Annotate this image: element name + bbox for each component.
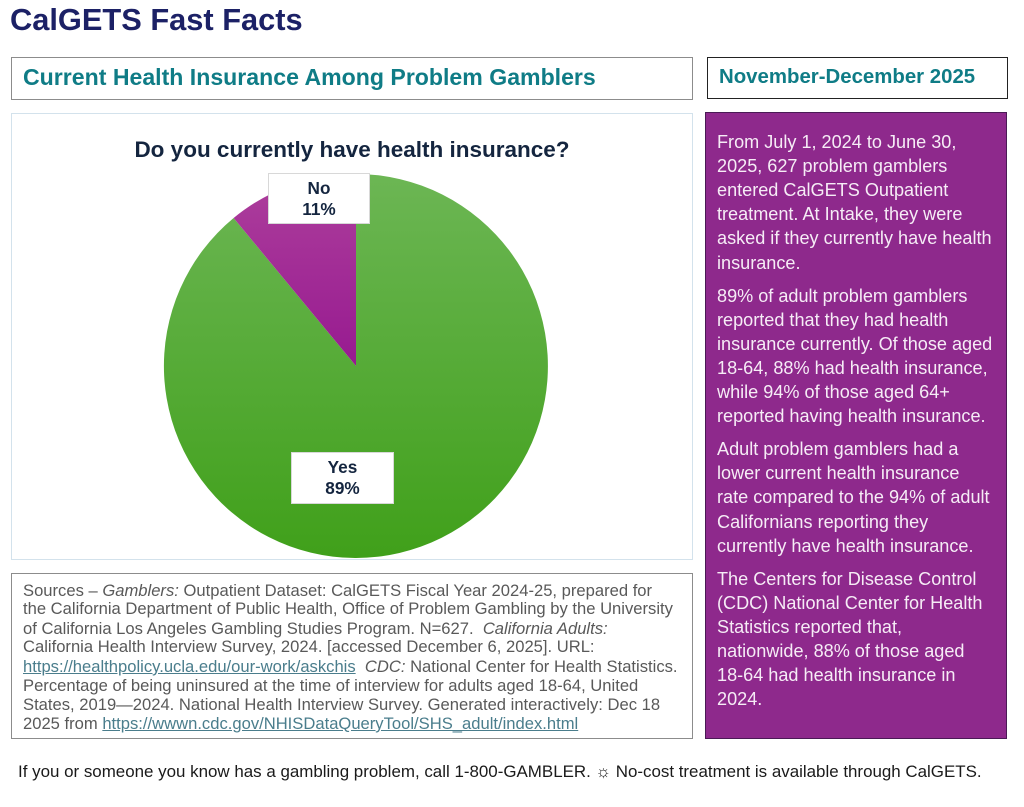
paragraph: gamblers rate: 89% of adult problem gamblers [717,286,967,306]
paragraph: CDC: nationwide, 88% of those aged [717,641,964,661]
panel: sources: the California Department of Public Health, Office of Problem Gambling by the University [23,599,673,618]
heading box: date [707,57,1008,99]
paragraph: gamblers rate: insurance currently. Of those aged [717,334,992,354]
panel: sources: of California Los Angeles Gambling Studies Program. N=627. California Adults: [23,619,608,638]
label: yes 89% [291,452,394,504]
paragraph: gamblers rate [717,286,992,426]
paragraph: intake: asked if they currently have health [717,228,992,248]
slice: no 11% [234,174,356,366]
paragraph: intake: treatment. At Intake, they were [717,204,962,224]
title: CalGETS Fast Facts [10,2,303,37]
label: yes 89%: Yes [328,457,357,477]
paragraph: gamblers rate: while 94% of those aged 64+ [717,382,950,402]
paragraph: california comparison: rate compared to the 94% of adult [717,487,990,507]
paragraph: intake [717,132,992,273]
paragraph: california comparison: lower current health insurance [717,463,959,483]
paragraph: intake: insurance. [717,253,800,273]
label: no 11%: 11% [302,199,336,219]
panel: sources: Percentage of being uninsured at the time of interview for adults aged 18-64, United [23,676,638,695]
paragraph: intake: 2025, 627 problem gamblers [717,156,947,176]
panel: sources: States, 2019—2024. National Health Interview Survey. Generated interactively: Dec 18 [23,695,660,714]
panel: sources: https://healthpolicy.ucla.edu/our-work/askchis CDC: National Center for Health Statistics. [23,657,678,676]
label: yes 89%: 89% [325,478,360,498]
panel: sources: 2025 from https://wwwn.cdc.gov/NHISDataQueryTool/SHS_adult/index.html [23,714,578,733]
paragraph: gamblers rate: 18-64, 88% had health insurance, [717,358,988,378]
panel: sources: California Health Interview Survey, 2024. [accessed December 6, 2025]. URL: [23,637,595,656]
paragraph: CDC: 2024. [717,689,762,709]
label: no 11% [268,173,370,224]
paragraph: gamblers rate: reported having health insurance. [717,406,986,426]
heading box: chart heading [11,57,693,100]
paragraph: CDC: The Centers for Disease Control [717,569,976,589]
paragraph: california comparison: Adult problem gamblers had a [717,439,958,459]
paragraph: CDC: (CDC) National Center for Health [717,593,982,613]
paragraph: intake: entered CalGETS Outpatient [717,180,948,200]
panel: pie chart [11,113,693,560]
chart title: Do you currently have health insurance? [134,137,570,162]
paragraph: california comparison [717,439,990,556]
label: no 11%: No [308,178,330,198]
paragraph: california comparison: Californians reporting they [717,512,928,532]
panel: sources: Sources – Gamblers: Outpatient Dataset: CalGETS Fiscal Year 2024-25, prepared for [23,581,652,600]
paragraph: intake: From July 1, 2024 to June 30, [717,132,956,152]
paragraph: california comparison: currently have health insurance. [717,536,973,556]
paragraph: CDC [717,569,982,709]
panel: summary text [705,112,1007,739]
paragraph: gamblers rate: reported that they had health [717,310,948,330]
panel: sources [11,573,693,739]
paragraph: CDC: 18-64 had health insurance in [717,665,955,685]
footer helpline: If you or someone you know has a gambling problem, call 1-800-GAMBLER. ☼ No-cost treatment is available through CalGETS. [18,762,982,781]
heading text: Current Health Insurance Among Problem Gamblers [23,64,596,90]
slice: yes 89% [164,174,548,558]
date text: November-December 2025 [719,66,975,88]
paragraph: CDC: Statistics reported that, [717,617,902,637]
